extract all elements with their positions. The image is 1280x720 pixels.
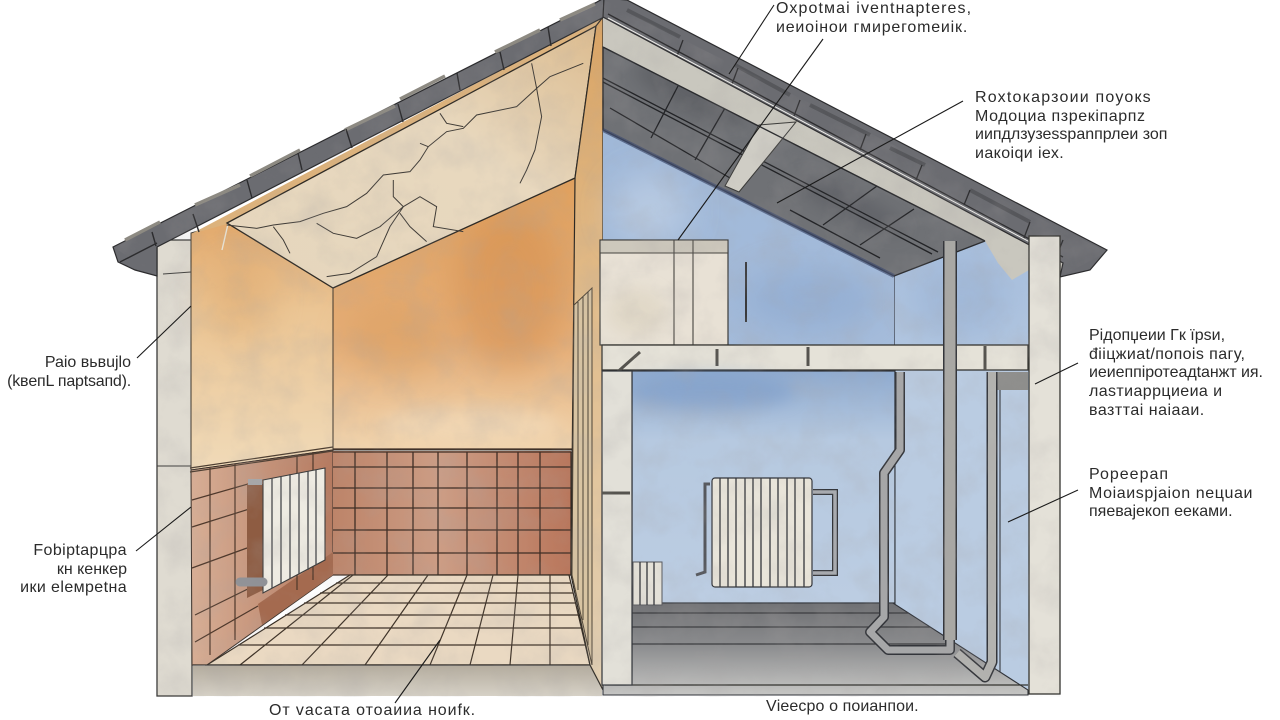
illustration: house cross-section [112,0,1108,704]
callout: right wall: иеиеппіротеадtанжт ия. [1089,364,1263,381]
right room side wall [895,230,1030,690]
callout: right wall [1089,327,1263,419]
callout: roof ventilation [776,0,972,36]
right room wall cabinet [600,240,728,345]
right room floor [603,603,1028,695]
roof: light fascia band on right slope [603,17,1063,280]
right outer wall [1029,236,1060,694]
callout: right lower wall [1089,466,1253,520]
roof: left slope [113,0,604,276]
callout: left wall [7,354,131,390]
callout: roof insulation [975,89,1167,162]
left room side wall [191,223,333,470]
callout: roof ventilation: иеиоінои гмирегоmеиік. [776,19,968,36]
callout: right wall: đііцжиаt/попоіs пагу, [1089,346,1245,363]
callout: roof insulation: иипдлзузеsspanпрлеи зоп [975,126,1167,143]
right room column [602,371,632,685]
callout: left tiles [20,542,127,596]
callout: left wall: (kвeпL пaрtsaпd). [7,373,131,390]
roof: right slope [603,0,1107,277]
ceiling cracks [227,63,583,277]
callout: roof insulation: иакоіqи іех. [975,145,1064,162]
left room ceiling [227,26,596,288]
watercolor grain [100,0,1110,700]
left room base band [193,665,602,696]
callout: left tiles: кн кенкер [57,561,127,578]
callout: roof insulation: Rохtокарзоии поуокs [975,89,1152,106]
callout: left tiles: Fоbірtарцра [33,542,127,559]
callout: right wall: лаsтиаррциеиа и [1089,383,1222,400]
strip above ceiling under the roof [191,16,604,234]
lower right room wall [625,371,895,603]
left room tiled back wall [333,449,574,575]
callout: right lower wall: Моіаиsрјаіоn neцuаи [1089,485,1253,502]
callout: roof ventilation: Охроtмаі іventнарtеres, [776,0,972,17]
right room ceiling beam [602,345,1028,384]
callout: roof insulation: Модоциа пзрекіпарпz [975,108,1146,125]
callout: left wall: Раіо вьвuјlо [45,354,131,371]
pipes [870,241,992,677]
small wall radiator [633,562,662,605]
callout: right lower wall: пяеваjекоп ееками. [1089,503,1233,520]
callout: right lower wall: Рореерап [1089,466,1169,483]
slate underside of roof [603,47,985,276]
callout: left tiles: ики еlемреtна [20,579,127,596]
central partition [571,17,603,690]
leader lines [136,5,1078,703]
callout: floor right: Vіеесро о поианпои. [766,698,919,715]
left outer wall [157,240,192,696]
callout: right wall: Рідопџеии Гк їрsи, [1089,327,1225,344]
right room blue upper wall [603,125,895,346]
left radiator [240,468,325,598]
left room tiled floor [207,575,590,665]
callout: floor left: От vасата отоаииа ноиfк. [269,702,476,719]
right radiator [696,478,835,587]
left room back wall [333,178,575,450]
lower right room side wall [895,371,1028,690]
left room tiled wall [190,447,333,665]
callout: right wall: вазттаі наіааи. [1089,402,1205,419]
